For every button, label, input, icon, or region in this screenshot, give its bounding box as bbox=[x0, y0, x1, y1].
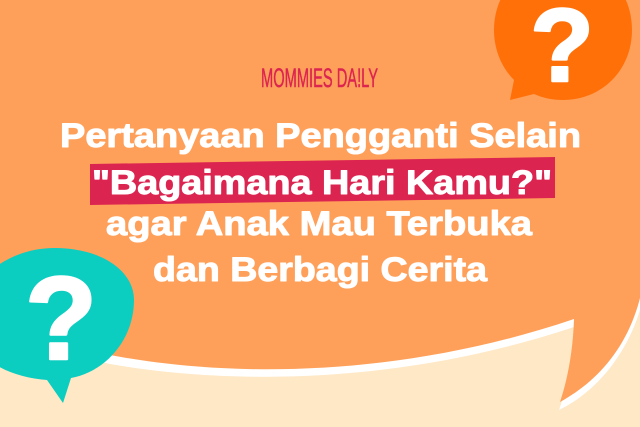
red highlight banner bbox=[90, 157, 555, 205]
teal speech bubble with question mark bbox=[0, 248, 134, 403]
title line 2, highlighted: "Bagaimana Hari Kamu?" bbox=[92, 164, 552, 202]
orange speech bubble with question mark bbox=[494, 0, 632, 104]
teal speech bubble with question mark: ? bbox=[25, 253, 97, 385]
title line 3: agar Anak Mau Terbuka bbox=[106, 205, 533, 243]
logo: Mommies Daily: MOMMIES DA!LY bbox=[261, 63, 378, 93]
title line 1: Pertanyaan Pengganti Selain bbox=[60, 117, 581, 155]
title line 4: dan Berbagi Cerita bbox=[153, 251, 488, 289]
white outline of large speech bubble bbox=[0, 290, 640, 410]
title bbox=[60, 117, 581, 289]
